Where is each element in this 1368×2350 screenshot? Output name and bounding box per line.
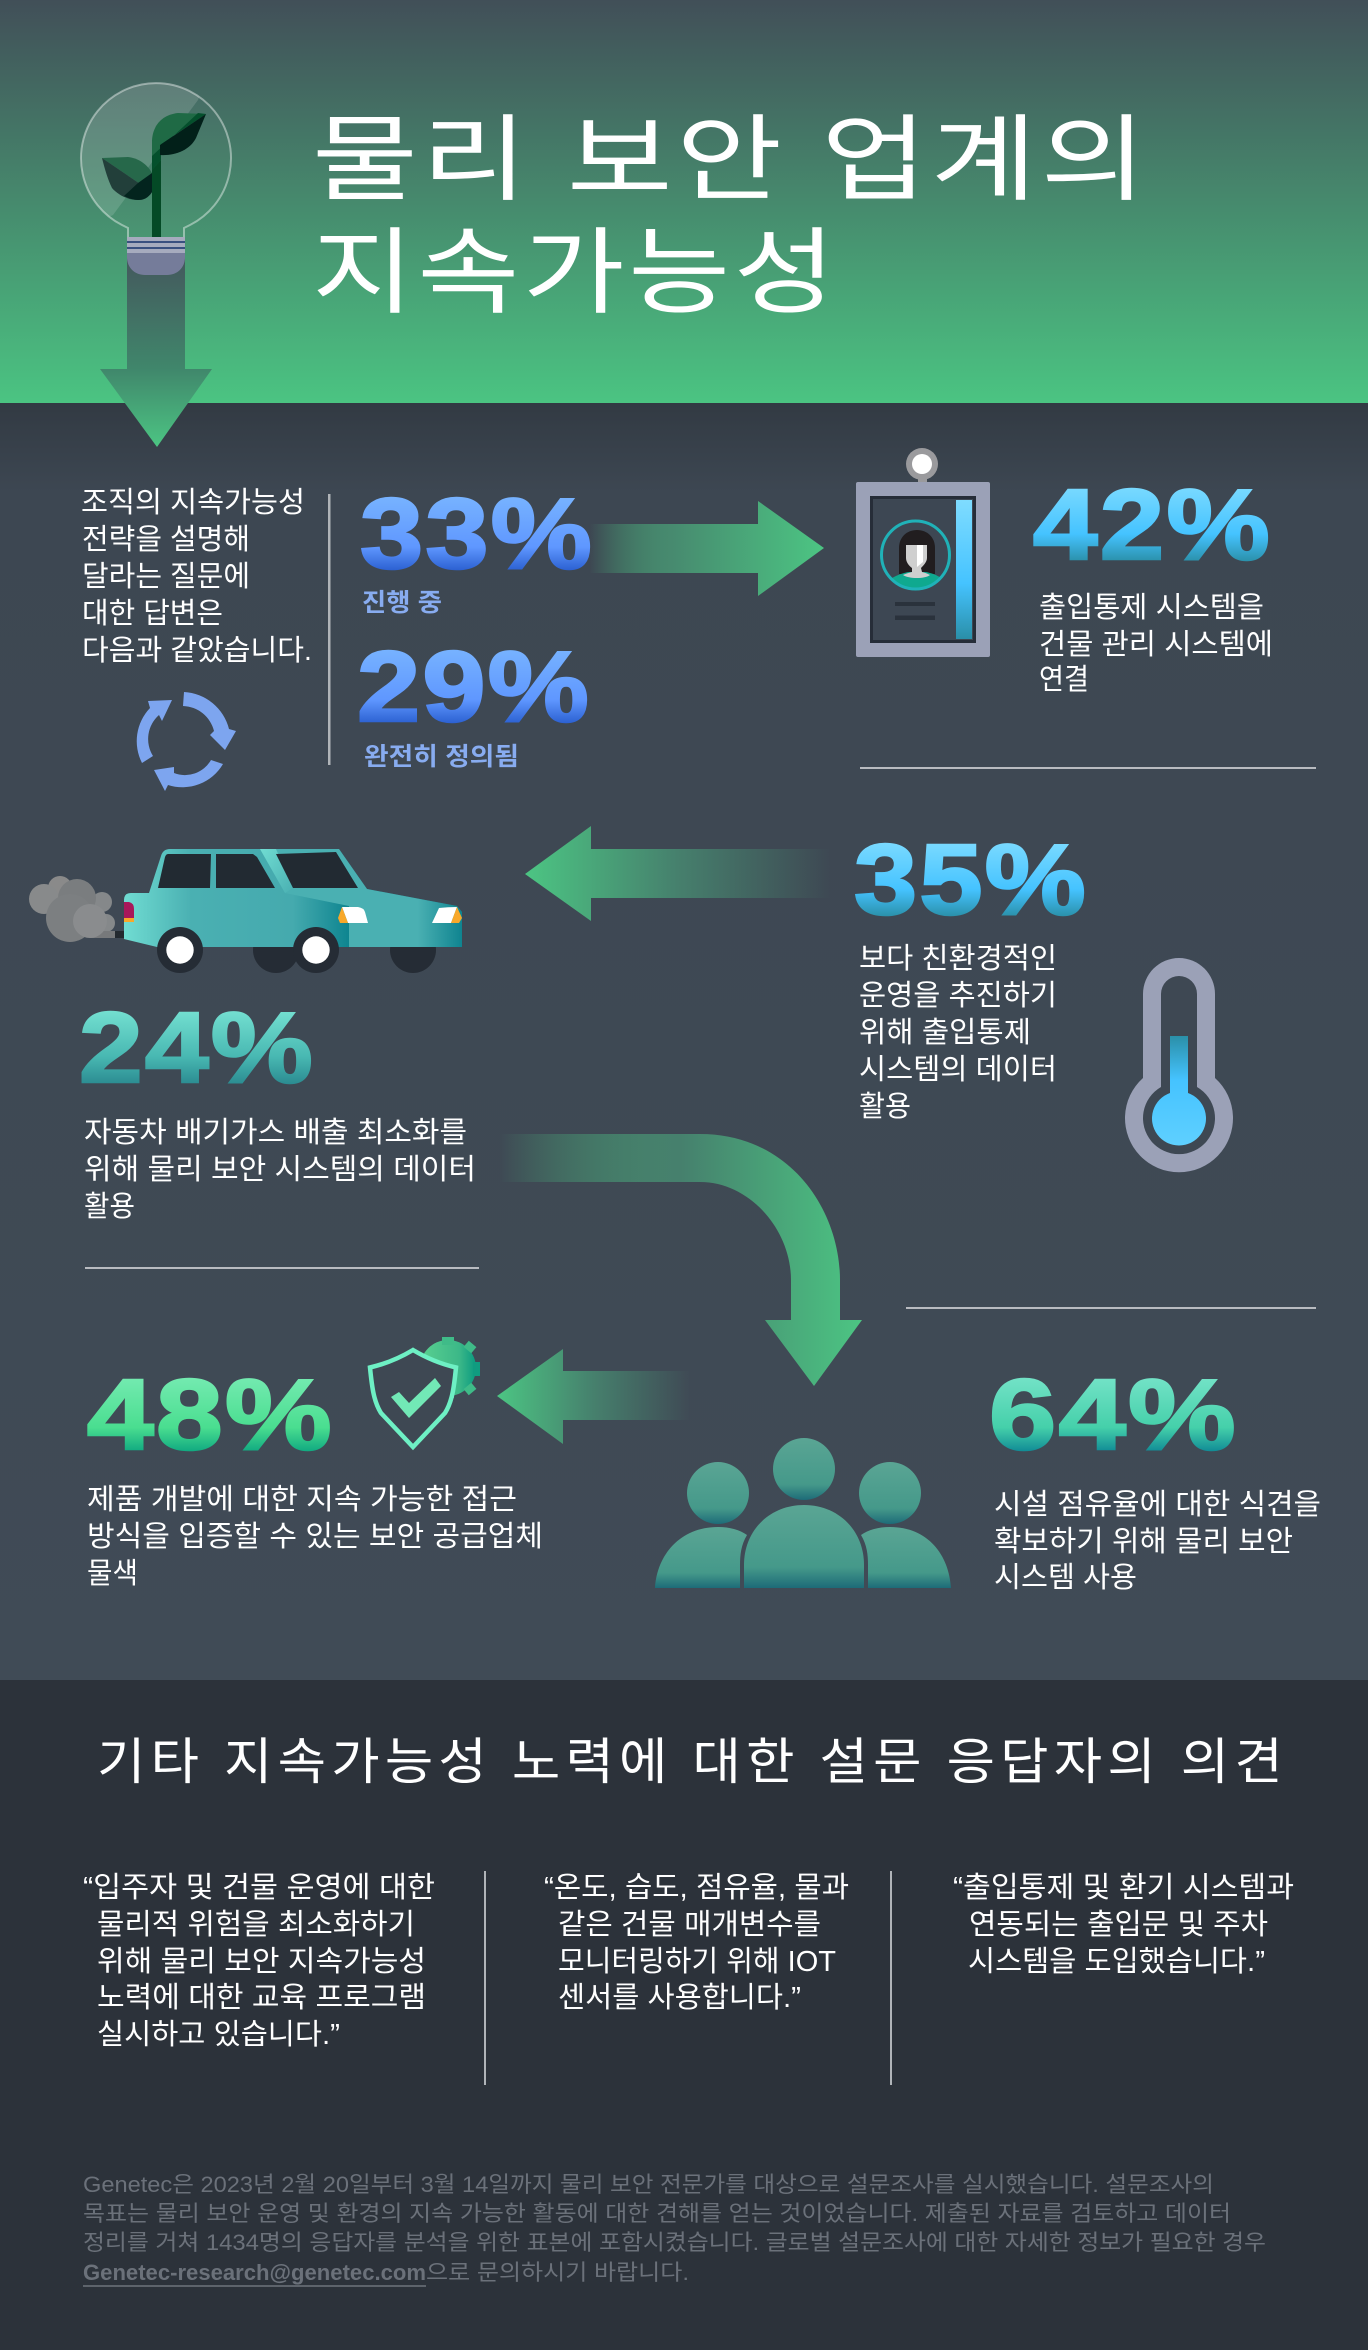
footnote: survey methodology: 정리를 거쳐 1434명의 응답자를 분석을 위한 표본에 포함시켰습니다. 글로벌 설문조사에 대한 자세한 정보가 필요한 경우 [83,2230,1266,2255]
footnote: survey methodology: 으로 문의하시기 바랍니다. [426,2260,689,2285]
icon: tail light [124,902,134,918]
icon: plant [102,113,206,237]
text: 64 percent description: 확보하기 위해 물리 보안 [994,1525,1293,1558]
stat: 29 percent fully defined: 완전히 정의됨 [364,743,519,771]
stat: 42 percent [1033,469,1273,696]
quote: IoT sensors: “온도, 습도, 점유율, 물과 [544,1872,849,1904]
text: 64 percent description: 시스템 사용 [994,1562,1137,1594]
arrow: left toward car [525,826,830,921]
text: 24 percent description [84,1116,476,1223]
quote: access control and HVAC: 연동되는 출입문 및 주차 [969,1908,1268,1941]
icon: front wheels [157,927,203,973]
quote: IoT sensors: 모니터링하기 위해 IOT [558,1945,836,1978]
text: survey question intro: 조직의 지속가능성 [81,487,305,519]
stat: 24 percent [79,992,476,1223]
icon: ID badge [856,448,990,657]
icon: smoke [29,876,115,942]
text: 42 percent description [1039,591,1273,696]
text: 48 percent description [87,1483,543,1590]
panel: respondent comments background [0,1680,1368,2350]
stat: 42 percent: 42% [1033,469,1272,581]
icon: car with exhaust smoke [29,849,462,973]
arrow: left toward shield [497,1349,690,1444]
stat: 64 percent [989,1359,1321,1594]
heading: respondent comments: 기타 지속가능성 노력에 대한 설문 응답자의 의견 [97,1734,1288,1790]
footnote: survey methodology: Genetec-research@genetec.com [83,2260,426,2285]
text: 64 percent description [994,1488,1321,1594]
stat: 48 percent [87,1359,543,1590]
arrow: down from bulb [100,250,212,447]
text: 35 percent description: 보다 친환경적인 [859,943,1057,975]
quote: IoT sensors [544,1872,849,2014]
quote: IoT sensors: 같은 건물 매개변수를 [558,1909,821,1941]
icon: car body [124,849,462,947]
text: 42 percent description: 출입통제 시스템을 [1039,591,1264,624]
footnote: survey methodology: Genetec은 2023년 2월 20일부터 3월 14일까지 물리 보안 전문가를 대상으로 설문조사를 실시했습니다. 설문조사의 [83,2172,1214,2197]
arrow: curved down toward people [500,1134,862,1386]
quote: training programs: 실시하고 있습니다.” [97,2018,340,2051]
text: survey question intro [81,487,312,667]
stat: 24 percent: 24% [79,992,315,1104]
title [312,107,1150,325]
icon: light bulb with plant and down arrow [80,82,232,447]
icon: recycle arrows [137,692,236,791]
text: 48 percent description: 물색 [87,1558,138,1590]
panel: survey results background [0,403,1368,1680]
quote: training programs [83,1871,435,2051]
quote: training programs: 노력에 대한 교육 프로그램 [97,1981,426,2014]
text: 24 percent description: 활용 [84,1190,135,1223]
text: 64 percent description: 시설 점유율에 대한 식견을 [994,1488,1321,1521]
icon: far wheels [253,927,299,973]
stat: 64 percent: 64% [989,1359,1238,1471]
quote: IoT sensors: 센서를 사용합니다.” [558,1982,801,2014]
stat: 48 percent: 48% [87,1359,334,1471]
icon: headlights [342,907,457,923]
text: 35 percent description: 위해 출입통제 [859,1016,1031,1049]
text: survey question intro: 다음과 같았습니다. [82,635,312,667]
title: 지속가능성 [312,220,839,325]
quote: training programs: 물리적 위험을 최소화하기 [97,1908,415,1941]
text: survey question intro: 달라는 질문에 [82,561,250,593]
icon: thermometer [1125,958,1233,1172]
text: 48 percent description: 방식을 입증할 수 있는 보안 공급업체 [87,1520,543,1553]
title: 물리 보안 업계의 [312,107,1150,212]
text: 24 percent description: 위해 물리 보안 시스템의 데이터 [84,1153,476,1186]
icon: bulb glass [80,82,232,237]
icon: gear [420,1337,480,1398]
text: 48 percent description: 제품 개발에 대한 지속 가능한 접근 [87,1483,517,1516]
text: 24 percent description: 자동차 배기가스 배출 최소화를 [84,1116,467,1149]
quote: access control and HVAC: 시스템을 도입했습니다.” [968,1945,1265,1978]
text: 35 percent description: 활용 [859,1090,911,1123]
quote: training programs: “입주자 및 건물 운영에 대한 [83,1871,435,1904]
text: 35 percent description: 시스템의 데이터 [859,1053,1057,1086]
stat: 33 percent in progress: 33% [360,478,594,590]
footnote: survey methodology [83,2172,1266,2287]
icon: bulb base [127,237,185,275]
text: 35 percent description: 운영을 추진하기 [859,979,1057,1012]
panel: header background [0,0,1368,403]
text: survey question intro: 전략을 설명해 [82,524,250,556]
quote: training programs: 위해 물리 보안 지속가능성 [97,1945,426,1978]
stat: 35 percent [854,824,1088,1123]
icon: shield with gear [370,1337,480,1447]
text: 42 percent description: 연결 [1039,664,1089,696]
stat: 29 percent fully defined: 29% [357,631,591,743]
text: 42 percent description: 건물 관리 시스템에 [1039,629,1273,661]
text: survey question intro: 대한 답변은 [82,597,223,630]
footnote: survey methodology: 목표는 물리 보안 운영 및 환경의 지속 가능한 활동에 대한 견해를 얻는 것이었습니다. 제출된 자료를 검토하고 데이터 [83,2201,1231,2226]
stat: 35 percent: 35% [854,824,1088,936]
quote: access control and HVAC: “출입통제 및 환기 시스템과 [953,1871,1294,1904]
quote: access control and HVAC [953,1871,1294,1978]
icon: group of people [655,1438,951,1588]
icon: portrait [882,521,950,592]
arrow: right toward ID card [590,501,824,596]
text: 35 percent description [859,943,1057,1123]
stat: 33 percent in progress: 진행 중 [362,589,442,617]
